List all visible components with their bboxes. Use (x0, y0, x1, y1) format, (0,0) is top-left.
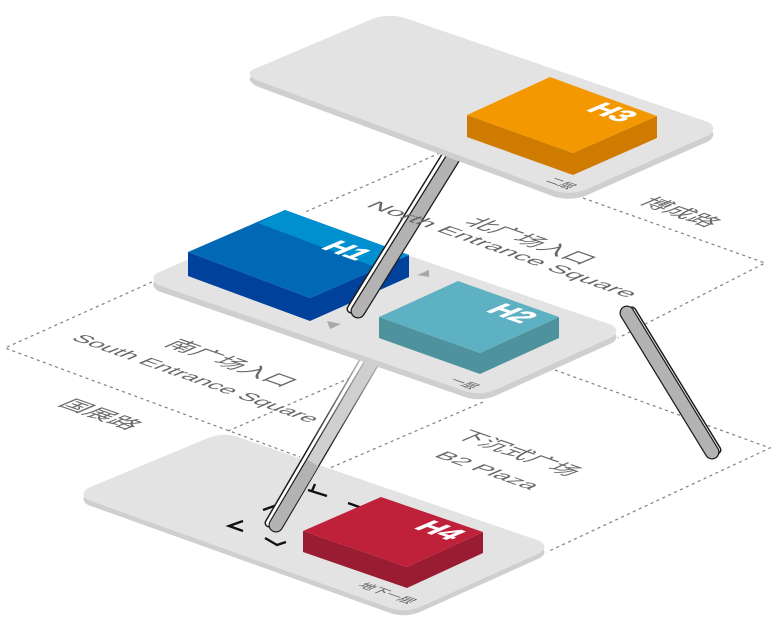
block: H4 (303, 497, 483, 588)
label: level two: 二层 (542, 176, 580, 191)
text: south square English: South Entrance Square (66, 332, 326, 425)
label: H1: H1 (314, 237, 381, 263)
dashed outline: plaza squares (5, 153, 770, 552)
label: level one: 一层 (445, 376, 483, 391)
text: north square Chinese: 北广场入口 (458, 215, 602, 267)
label: H2: H2 (479, 300, 546, 326)
label: H4: H4 (407, 517, 474, 543)
arrow: triangle marker right (417, 270, 429, 277)
black direction marks around escalator base (229, 484, 362, 545)
text: B2 plaza Chinese: 下沉式广场 (448, 428, 588, 479)
block: H3 (467, 77, 657, 175)
plate: basement level (84, 435, 544, 615)
text: road name north: 博成路 (633, 195, 727, 230)
plate: level one (153, 215, 616, 399)
escalator: right side (627, 311, 717, 452)
plate: level two (250, 16, 713, 199)
block: H1 (188, 210, 409, 321)
block: H2 (379, 281, 559, 374)
arrow: triangle marker left (327, 321, 341, 329)
label: H3: H3 (579, 99, 646, 125)
text: south square Chinese: 南广场入口 (158, 337, 303, 390)
text: north square English: North Entrance Square (361, 199, 644, 300)
text: road name south: 国展路 (52, 397, 148, 432)
escalator: basement to level one (269, 360, 372, 531)
label: basement level one: 地下一层 (354, 581, 420, 605)
escalator: level one to level two (351, 150, 456, 311)
text: B2 plaza English: B2 Plaza (429, 449, 546, 492)
